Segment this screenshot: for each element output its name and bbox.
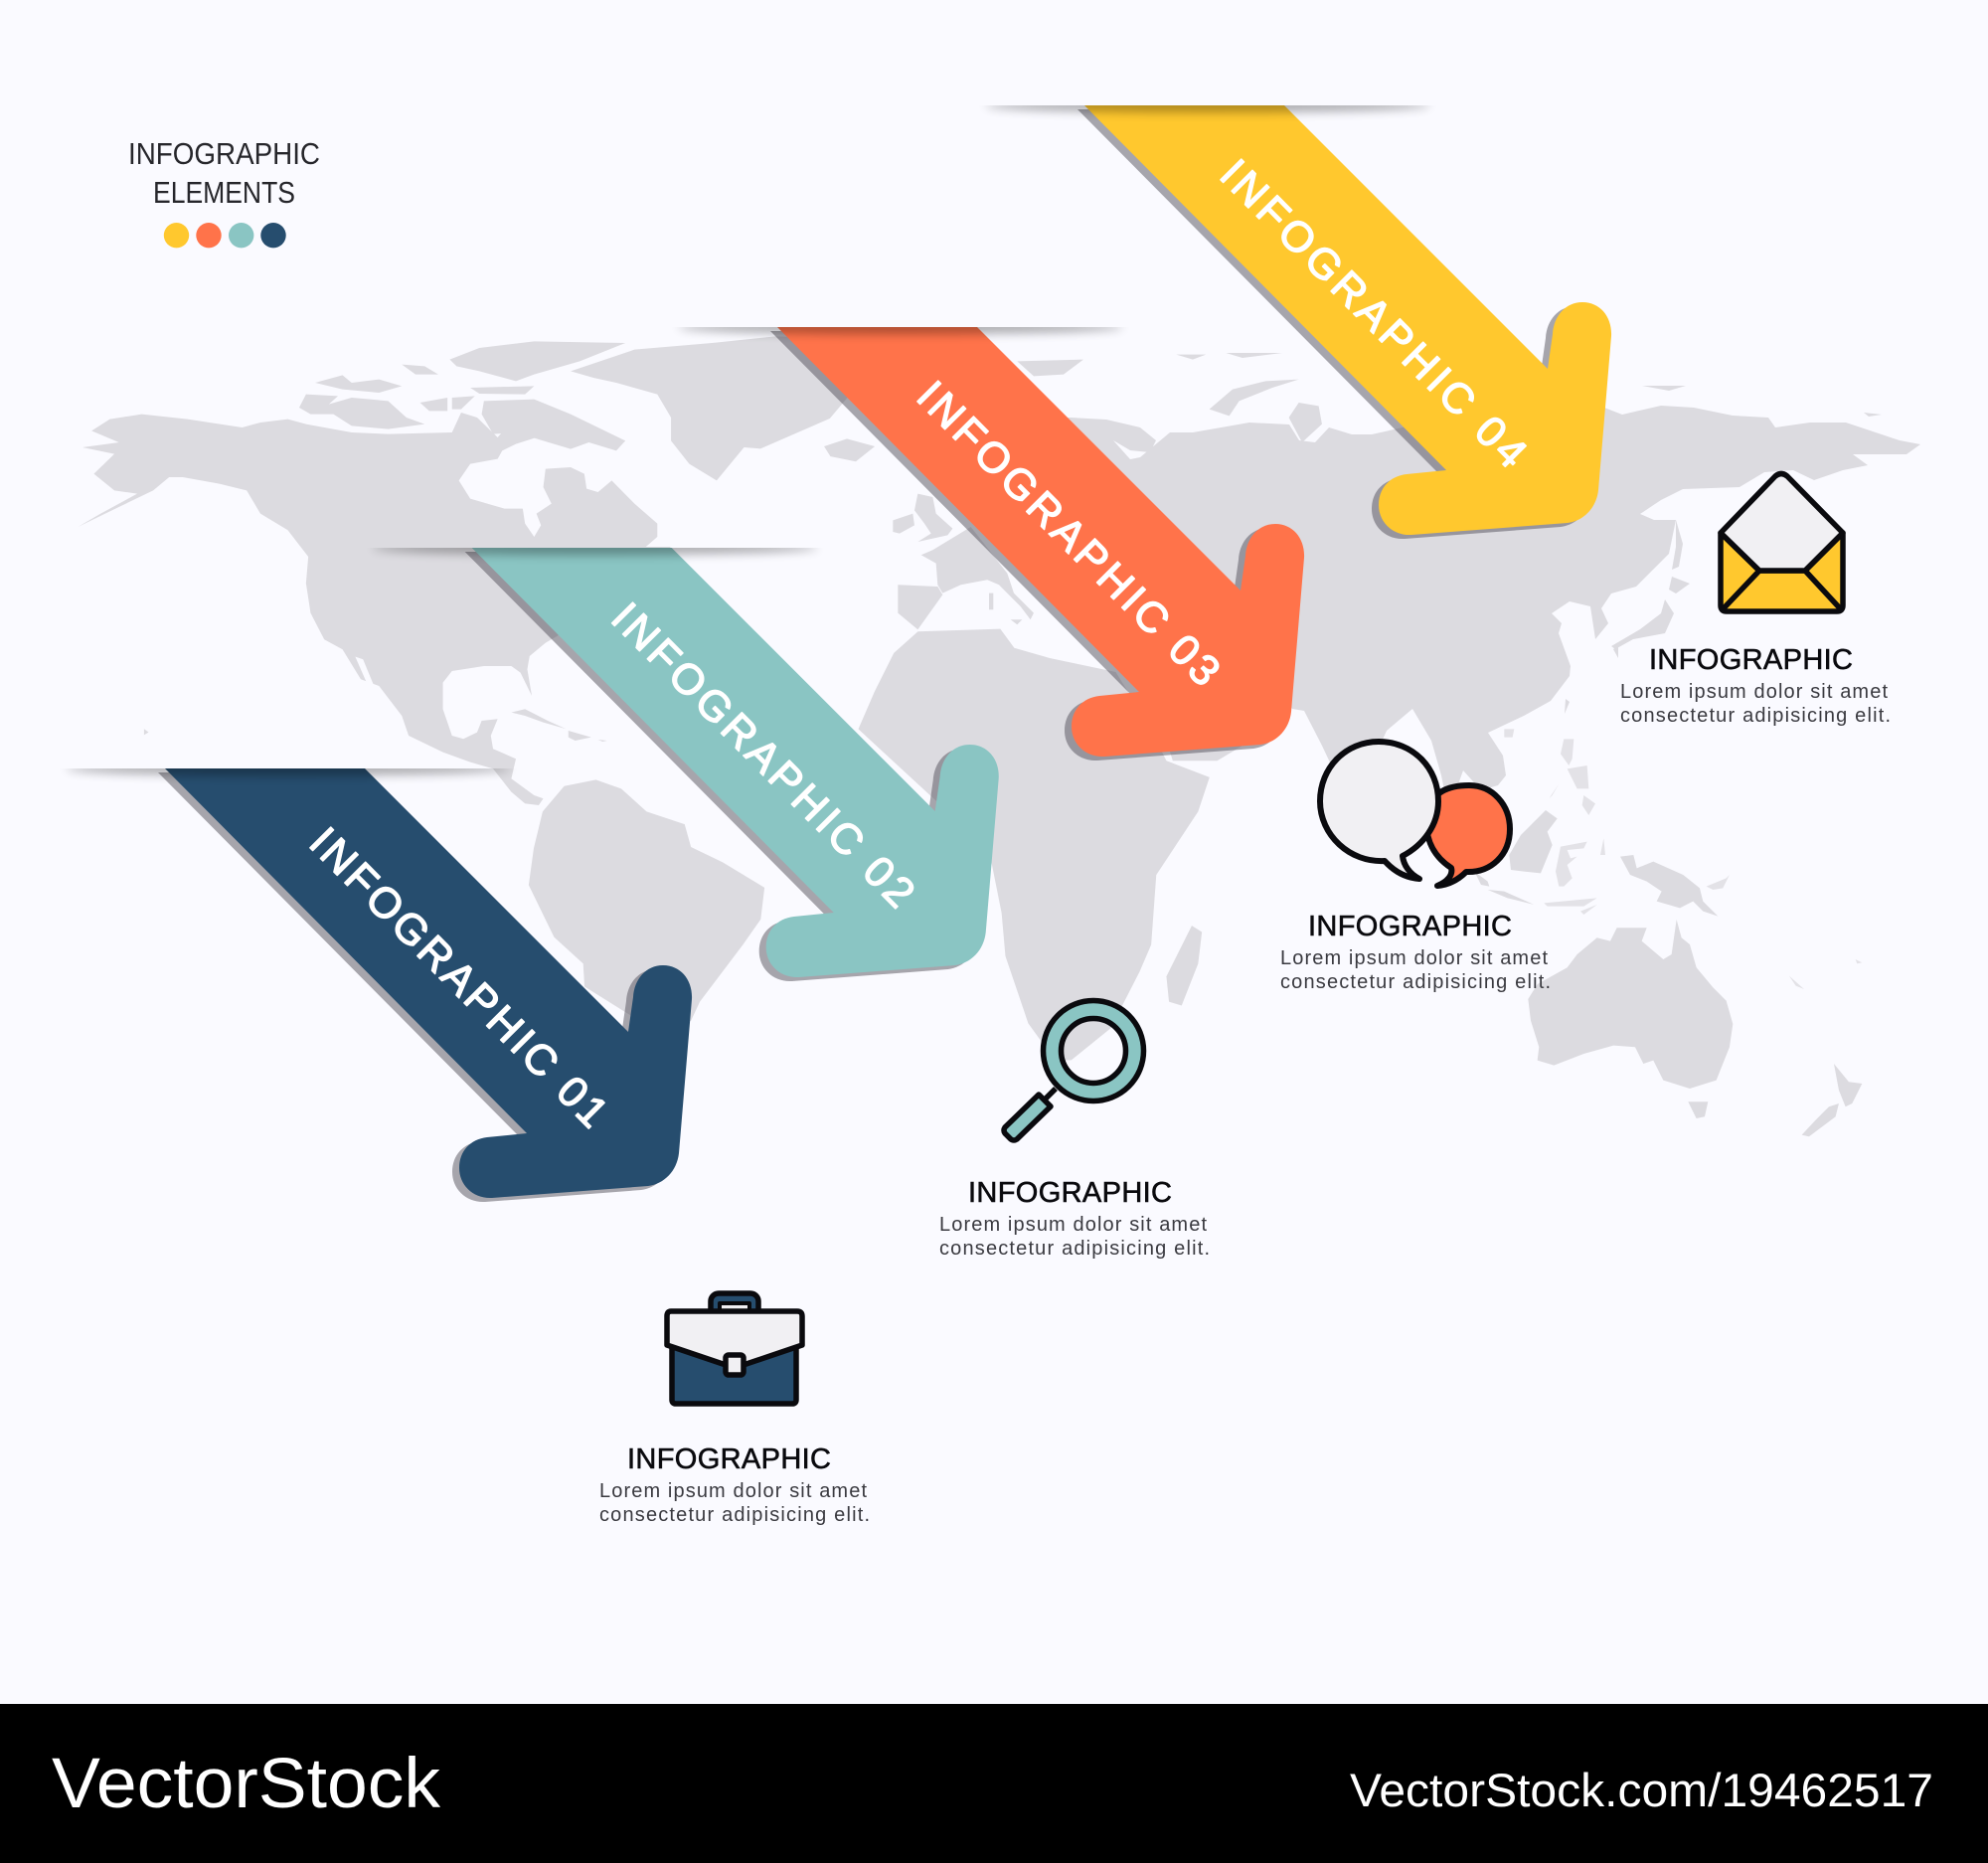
australia (1528, 920, 1733, 1089)
south america (529, 779, 764, 1034)
colour dots (164, 223, 286, 248)
arrow 03: orange (678, 320, 1304, 761)
south america, africa, iceland (overview scale) (529, 438, 1280, 1060)
label: bubbles text (1280, 911, 1551, 993)
africa (859, 629, 1210, 1060)
label: magnifier text: consectetur adipisicing elit. (939, 1238, 1210, 1260)
label: envelope text: Lorem ipsum dolor sit amet (1620, 681, 1888, 703)
arrow 02: teal: INFOGRAPHIC 02 (602, 593, 923, 918)
southeast asia and oceania (1474, 729, 1862, 1136)
madagascar (1166, 926, 1202, 1005)
greenland (571, 336, 862, 480)
footer url: VectorStock.com/19462517 (1350, 1764, 1933, 1816)
icon: speech bubbles (1320, 742, 1510, 886)
borneo (1509, 810, 1558, 873)
icon: briefcase (667, 1293, 802, 1404)
label: envelope text: INFOGRAPHIC (1649, 644, 1853, 676)
label: envelope text (1620, 644, 1891, 727)
label: briefcase text: INFOGRAPHIC (627, 1443, 831, 1475)
arrow 02: teal (373, 541, 999, 981)
sumatra and java (1474, 872, 1534, 905)
title: INFOGRAPHIC (128, 136, 320, 171)
arrow 03: orange: INFOGRAPHIC 03 (908, 372, 1230, 696)
europe and arctic russia (893, 353, 1322, 629)
icon: envelope (1721, 473, 1843, 611)
label: bubbles text: consectetur adipisicing elit. (1280, 971, 1551, 993)
island groups (1504, 729, 1862, 989)
label: briefcase text: Lorem ipsum dolor sit amet (599, 1480, 867, 1502)
new zealand (1802, 1064, 1862, 1136)
label: briefcase text (599, 1443, 870, 1526)
arabia (1141, 659, 1280, 761)
arrow 01: navy: INFOGRAPHIC 01 (300, 818, 617, 1137)
gulf of california (355, 657, 384, 709)
footer bar (0, 1704, 1988, 1863)
caribbean (144, 709, 607, 742)
title (128, 136, 320, 210)
label: bubbles text: Lorem ipsum dolor sit amet (1280, 947, 1548, 969)
eurasia mainland (1024, 406, 1920, 845)
title block (128, 136, 320, 248)
arrow 04: yellow: INFOGRAPHIC 04 (1211, 150, 1536, 477)
label: magnifier text: Lorem ipsum dolor sit amet (939, 1214, 1207, 1236)
japan and pacific russia islands (1565, 386, 1882, 714)
arctic islands (299, 341, 625, 450)
icon: magnifying glass (1004, 1000, 1143, 1140)
label: briefcase text: consectetur adipisicing elit. (599, 1504, 870, 1526)
arrow 01: navy (66, 762, 692, 1202)
label: bubbles text: INFOGRAPHIC (1308, 911, 1512, 942)
label: magnifier text: INFOGRAPHIC (968, 1177, 1172, 1209)
iceland (824, 438, 875, 461)
title: ELEMENTS (153, 175, 295, 210)
arrow 04: yellow (985, 98, 1611, 539)
label: envelope text: consectetur adipisicing elit. (1620, 705, 1891, 727)
world map (78, 336, 1920, 1136)
north america and arctic (78, 336, 862, 805)
label: magnifier text (939, 1177, 1210, 1260)
new guinea (1620, 855, 1718, 917)
footer logo: VectorStock (52, 1745, 441, 1823)
tasmania (1688, 1101, 1708, 1118)
